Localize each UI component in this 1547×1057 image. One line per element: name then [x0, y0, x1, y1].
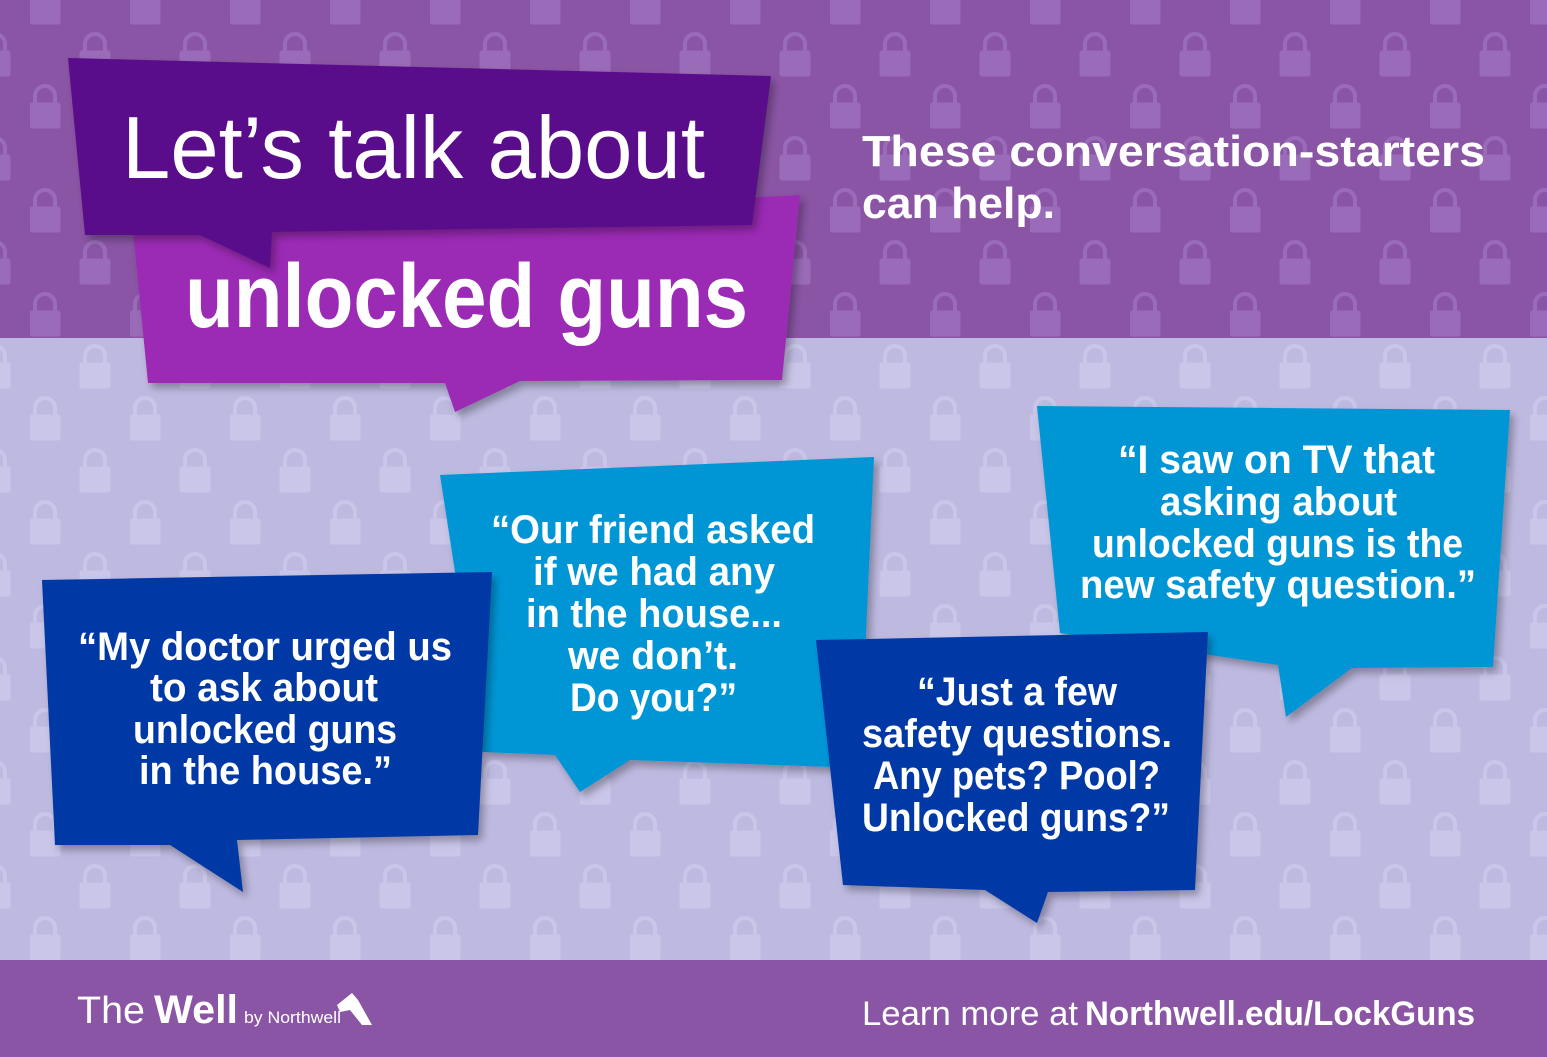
footer link	[862, 995, 1475, 1033]
subheading: These conversation-starters	[862, 127, 1485, 176]
bubble: I saw on TV	[1037, 406, 1510, 717]
bubble: my doctor: to ask about	[150, 666, 378, 710]
background lower band	[0, 338, 1547, 960]
bubble: I saw on TV: “I saw on TV that	[1118, 438, 1435, 482]
bubble: just a few: Unlocked guns?”	[862, 796, 1170, 840]
subheading	[862, 127, 1485, 228]
icon: origami bird	[337, 993, 372, 1025]
footer band	[0, 960, 1547, 1057]
title bubble: unlocked guns	[133, 195, 800, 412]
bubble: my doctor: unlocked guns	[133, 708, 397, 752]
bubble: I saw on TV: unlocked guns is the	[1092, 522, 1463, 566]
footer link: Northwell.edu/LockGuns	[1085, 995, 1475, 1033]
background top band	[0, 0, 1547, 338]
bubble: our friend asked: Do you?”	[570, 676, 737, 720]
title line 2: unlocked guns	[185, 247, 748, 347]
bubble: just a few	[816, 632, 1208, 923]
bubble: my doctor: in the house.”	[139, 749, 392, 793]
bubble: our friend asked: we don’t.	[567, 634, 738, 678]
title bubble: let's talk about	[68, 58, 771, 268]
title line 1: Let’s talk about	[122, 98, 705, 197]
bubble: my doctor: “My doctor urged us	[78, 625, 452, 669]
bubble: just a few: “Just a few	[917, 670, 1118, 714]
bubble: our friend asked: if we had any	[533, 550, 776, 594]
bubble: just a few: Any pets? Pool?	[873, 754, 1160, 798]
logo: The Well by Northwell	[77, 988, 372, 1032]
bubble: our friend asked	[440, 457, 874, 792]
bubble: our friend asked: in the house...	[526, 592, 782, 636]
subheading: can help.	[862, 179, 1055, 228]
bubble: I saw on TV: asking about	[1160, 480, 1397, 524]
logo: The Well by Northwell: by Northwell	[244, 1008, 341, 1027]
bubble: my doctor	[42, 572, 492, 892]
footer link: Learn more at	[862, 995, 1079, 1033]
logo: The Well by Northwell: The	[77, 990, 145, 1032]
bubble: our friend asked: “Our friend asked	[491, 508, 815, 552]
bubble: just a few: safety questions.	[862, 712, 1172, 756]
logo: The Well by Northwell: Well	[154, 988, 238, 1032]
bubble: I saw on TV: new safety question.”	[1080, 563, 1476, 607]
